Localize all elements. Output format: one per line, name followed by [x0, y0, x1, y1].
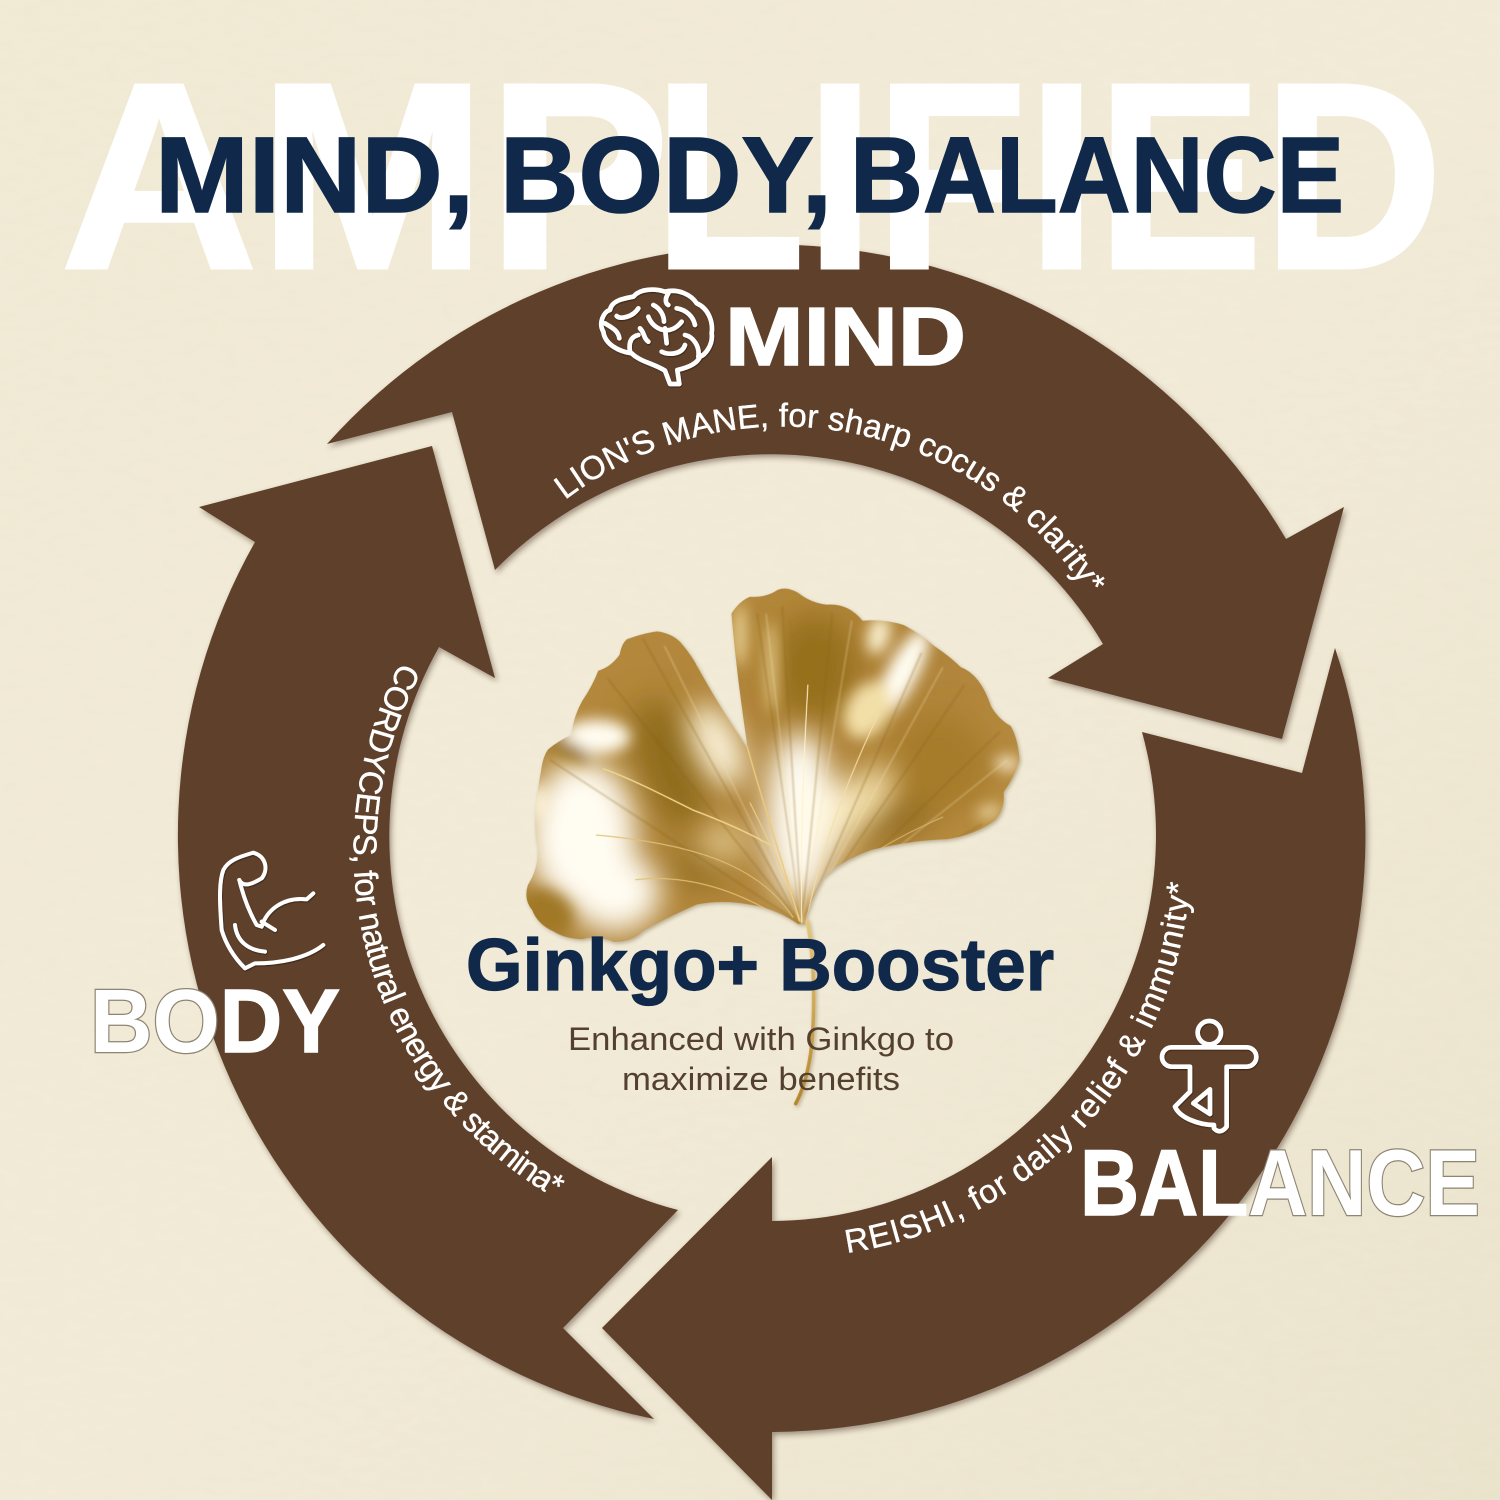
heading: Ginkgo+ Booster: Ginkgo+ Booster	[466, 925, 1054, 1006]
title	[155, 114, 1344, 235]
title: BODY,	[500, 114, 832, 235]
arrow: balance segment	[602, 648, 1365, 1500]
label: MIND: MIND	[725, 290, 966, 383]
title: BALANCE	[850, 114, 1344, 235]
curved text: lion's mane: LION'S MANE, for sharp cocus & clarity*	[554, 402, 1105, 588]
background word: AMPLIFIED: AMP	[60, 28, 670, 325]
leaf veins	[596, 664, 943, 922]
icon: golden ginkgo leaf	[511, 578, 1029, 1104]
curved text: cordyceps: CORDYCEPS, for natural energy & stamina*	[349, 666, 564, 1192]
leaf ray streaks	[550, 606, 1007, 924]
subtext	[568, 1021, 954, 1097]
background word: AMPLIFIED: LIFIED	[653, 28, 1443, 325]
leaf stem	[796, 921, 814, 1104]
icon: brain	[601, 290, 712, 384]
curved text: reishi: REISHI, for daily relief & immunity*	[845, 882, 1194, 1253]
subtext: maximize benefits	[622, 1061, 900, 1097]
label: BODY: BODY	[90, 972, 340, 1072]
arrow: mind segment	[327, 245, 1344, 739]
icon: yoga figure	[1162, 1021, 1256, 1131]
icon: flexed arm	[220, 853, 323, 968]
title: MIND,	[155, 114, 474, 235]
leaf blade	[511, 578, 1029, 946]
subtext: Enhanced with Ginkgo to	[568, 1021, 954, 1057]
background word: AMPLIFIED	[60, 28, 1443, 325]
arrow: body segment	[178, 446, 678, 1419]
